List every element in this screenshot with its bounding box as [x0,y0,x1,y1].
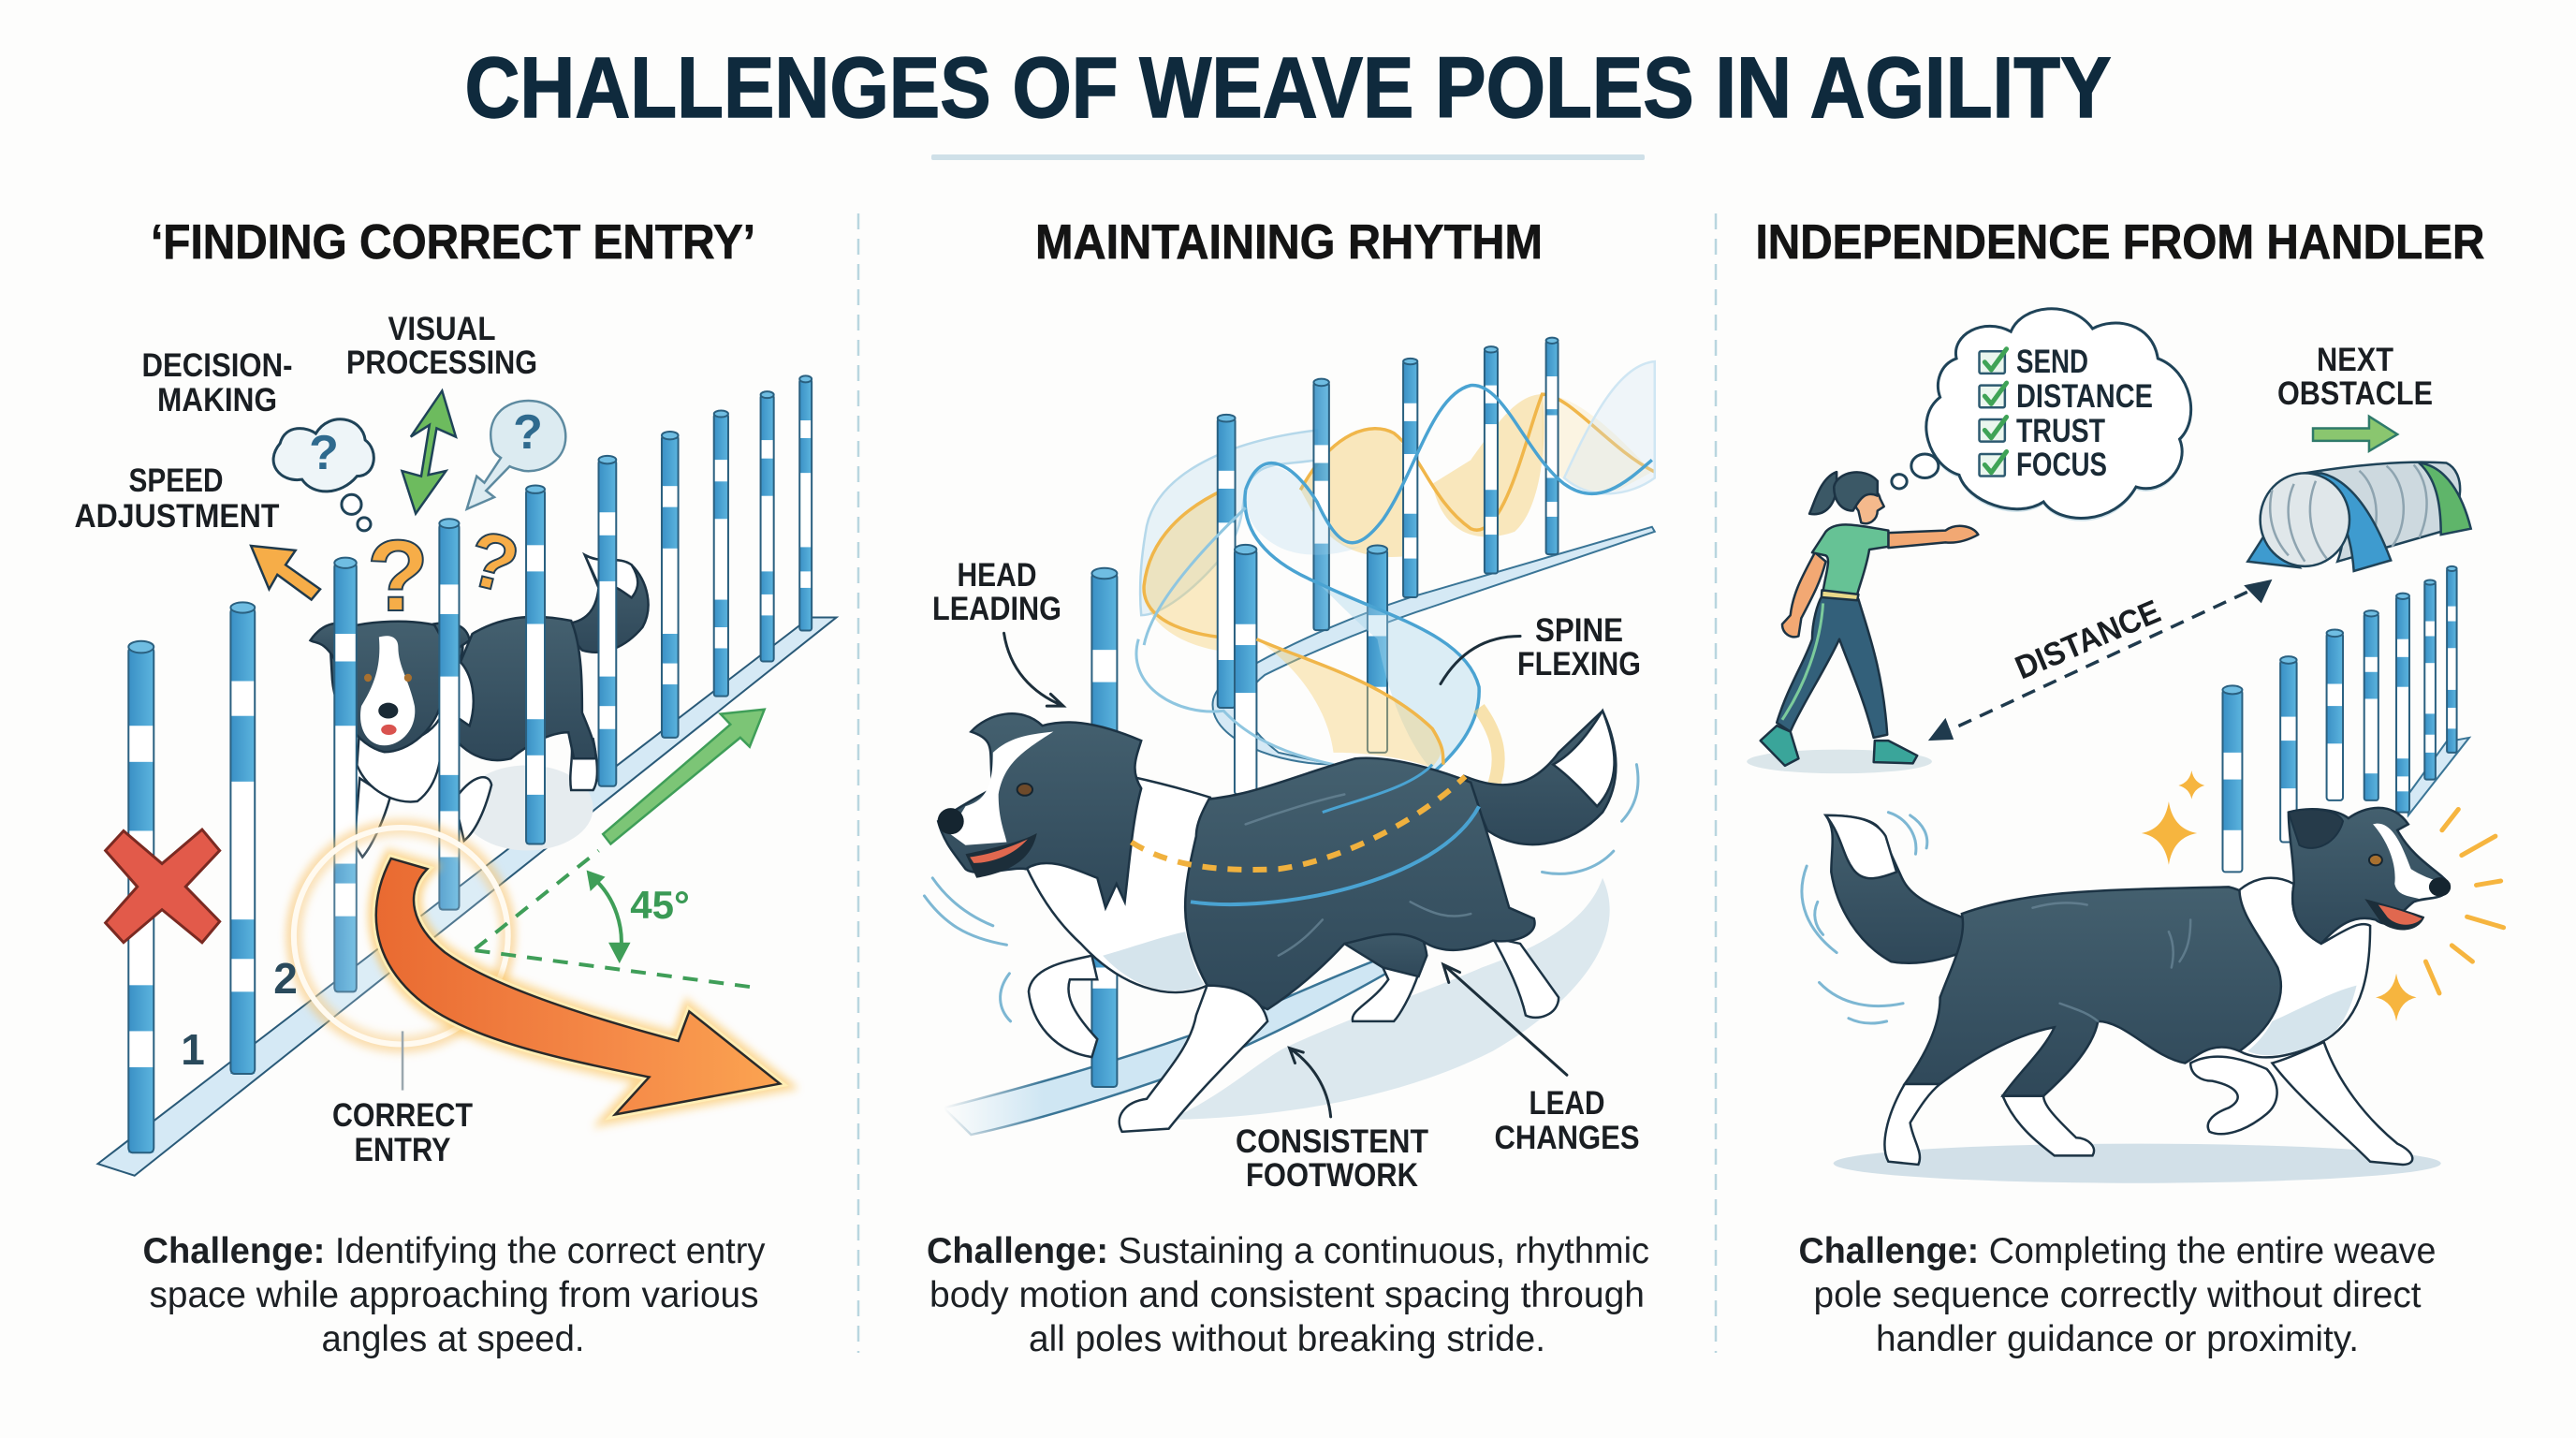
leader: lead changes [1443,964,1567,1075]
spine arcs and dashed spine line [1132,765,1479,904]
label: visual processing: PROCESSING [346,345,537,381]
weave pole 6 [599,456,616,786]
red x on wrong entry [106,829,220,943]
label: consistent footwork [1236,1123,1428,1194]
challenge text 2: Challenge: Sustaining a continuous, rhythmic [927,1231,1649,1271]
illustration: handler, tunnel, poles and dog [1747,309,2504,1183]
pole f [1403,359,1417,597]
challenge text 2 [927,1231,1649,1359]
challenge text 1: space while approaching from various [150,1275,758,1315]
pole 5 [2396,594,2409,813]
dog behind poles [310,555,649,858]
label: consistent footwork: FOOTWORK [1246,1157,1418,1194]
angle label: 45° [630,883,690,927]
label: lead changes: CHANGES [1494,1120,1640,1156]
label: spine flexing [1517,612,1641,682]
illustration: dog approaching weave poles [97,375,837,1176]
label: next obstacle: OBSTACLE [2277,375,2433,412]
leader: head leading [1004,633,1063,706]
challenge text 3 [1799,1231,2436,1359]
question marks: ? [513,405,543,460]
weave pole 7 [662,432,679,738]
label: next obstacle [2277,342,2433,412]
tail motion lines [1802,813,1927,1023]
label: spine flexing: SPINE [1535,612,1623,649]
panel: independence from handler [1747,215,2504,1359]
label: visual processing: VISUAL [388,311,496,347]
checklist words: FOCUS [2016,447,2107,483]
pole 2 [2280,656,2297,843]
question marks: ? [367,519,429,632]
pole g [1485,346,1498,574]
checklist words [2016,344,2153,483]
title underline [931,154,1645,160]
challenge text 3: Challenge: Completing the entire weave [1799,1231,2436,1271]
panel: maintaining rhythm [924,215,1655,1359]
challenge text 1: Challenge: Identifying the correct entry [142,1231,766,1271]
pole e [1368,546,1387,753]
motion lines [924,765,1638,1021]
label: decision-making: MAKING [157,382,277,418]
question marks: ? [309,426,339,480]
question marks: ? [460,513,527,610]
number 2: 2 [273,954,298,1003]
label: correct entry [332,1097,473,1168]
speech bubble [467,401,565,509]
label: head leading [932,557,1061,627]
pole c [1235,545,1256,795]
weave pole 3 [334,558,357,991]
label: correct entry: CORRECT [332,1097,473,1134]
title: CHALLENGES OF WEAVE POLES IN AGILITY [464,40,2112,136]
rhythm ribbons front [1136,386,1652,806]
label: head leading: HEAD [957,557,1037,594]
next obstacle arrow [2313,417,2397,451]
thought cloud with checklist [1892,309,2191,521]
ground shadow [1169,878,1610,1120]
weave pole 4 [439,519,459,910]
challenge text 3: handler guidance or proximity. [1876,1319,2359,1359]
weave pole 9 [761,391,774,661]
thought cloud [273,419,373,531]
pole 3 [2327,629,2343,800]
label: correct entry: ENTRY [354,1132,451,1168]
label: distance: DISTANCE [2010,593,2166,686]
near ground ribbon [944,956,1397,1135]
checklist words: SEND [2016,344,2088,380]
ground strip [97,617,837,1176]
challenge text 1: angles at speed. [322,1319,584,1359]
dog moving independently [1826,808,2451,1165]
rhythm ribbons back [1140,361,1655,651]
question marks [309,405,543,632]
dashed angle lines [475,851,753,987]
challenge text 1 [142,1231,766,1359]
checklist words: TRUST [2016,413,2105,449]
weave pole 1 [128,641,154,1152]
checklist words: DISTANCE [2016,378,2153,415]
pole b [1218,415,1236,708]
label: speed adjustment [75,462,279,535]
pole 7 [2447,566,2457,753]
far ground ribbon [1212,527,1655,765]
pole h [1546,338,1559,554]
label: speed adjustment: SPEED [129,462,223,499]
label: lead changes [1494,1085,1640,1156]
pole d [1313,379,1329,630]
leader: spine flexing [1441,636,1520,684]
ground shadow [1834,1144,2441,1183]
challenge text 2: all poles without breaking stride. [1029,1319,1545,1359]
heading: independence from handler: INDEPENDENCE FROM HANDLER [1756,215,2484,270]
label: visual processing [346,311,537,381]
label: decision-making: DECISION- [142,347,292,384]
challenge text 2: body motion and consistent spacing through [929,1275,1645,1315]
label: decision-making [142,347,292,418]
weave pole 5 [526,485,545,844]
illustration: dog weaving with rhythm ribbons [924,338,1655,1135]
sparkles [2142,770,2417,1021]
number 1: 1 [181,1025,205,1074]
weave pole 2 [230,602,255,1074]
orange entry path arrow [376,858,780,1115]
weave pole base [2408,738,2469,815]
dog running [938,711,1616,1132]
label: consistent footwork: CONSISTENT [1236,1123,1428,1160]
handler figure [1747,472,1978,773]
glowing correct entry ring [294,828,508,1044]
heading: finding correct entry: ‘FINDING CORRECT ENTRY’ [151,215,755,270]
excitement rays [2425,809,2504,993]
pole 1 [2222,685,2242,872]
weave pole 10 [799,375,812,631]
label: head leading: LEADING [932,591,1061,627]
panel: finding correct entry [75,215,837,1359]
challenge text 3: pole sequence correctly without direct [1814,1275,2422,1315]
green double arrow [402,390,456,514]
label: next obstacle: NEXT [2317,342,2393,378]
label: spine flexing: FLEXING [1517,646,1641,682]
distance double arrow [1928,580,2272,741]
label: lead changes: LEAD [1530,1085,1604,1122]
weave pole 8 [714,411,728,697]
pole 4 [2364,610,2378,800]
heading: maintaining rhythm: MAINTAINING RHYTHM [1035,215,1543,270]
label: speed adjustment: ADJUSTMENT [75,498,279,535]
angle arc arrow [587,871,631,963]
orange speed arrow [251,546,320,600]
leader: consistent footwork [1290,1049,1331,1117]
pole 6 [2424,580,2436,780]
pole a [1091,568,1117,1087]
green direction arrow [603,710,765,844]
tunnel obstacle [2247,462,2471,571]
